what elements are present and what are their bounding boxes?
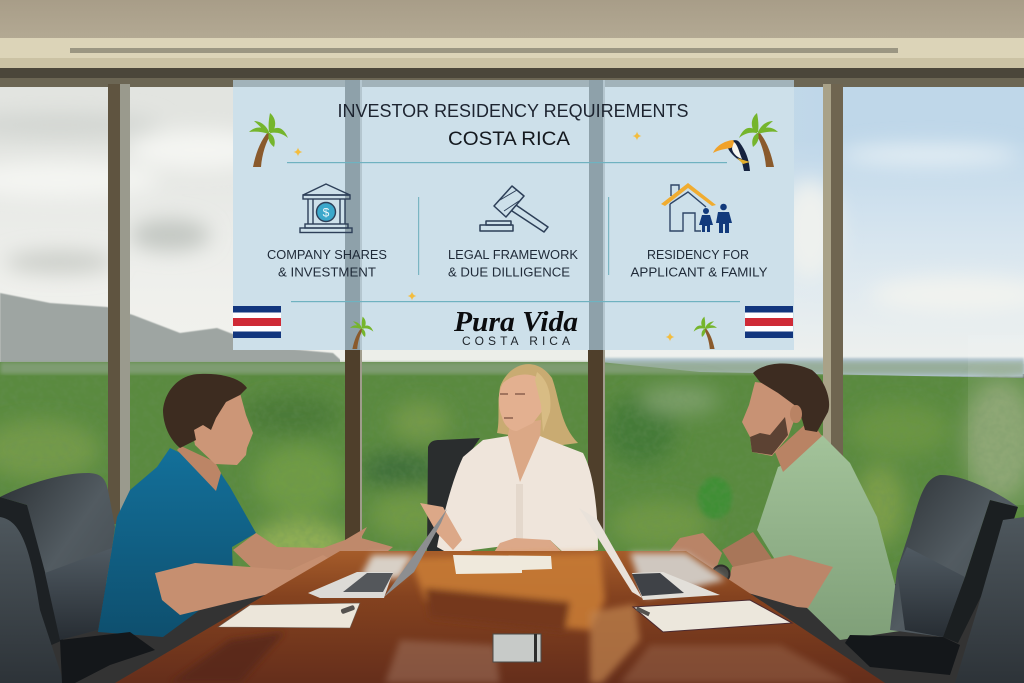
column: company shares (267, 184, 387, 280)
frame seen through the panel (233, 80, 794, 350)
icon: toucan and palm (713, 113, 778, 171)
person: man at left (98, 374, 393, 637)
chairs left (0, 473, 155, 683)
icon: bank with dollar coin: $ (323, 206, 330, 220)
panel: translucent infographic sign (233, 80, 794, 350)
hand (662, 533, 722, 577)
forest texture (307, 376, 1023, 548)
person: man at right (662, 364, 907, 640)
arm (727, 555, 833, 608)
armrest (60, 632, 155, 683)
flag: right (745, 306, 793, 338)
hair front (535, 372, 550, 432)
subtitle: COSTA RICA (448, 129, 570, 150)
label: & INVESTMENT (278, 264, 376, 280)
panel background (233, 80, 794, 350)
column: legal framework (448, 186, 578, 280)
icon: house with family (661, 183, 732, 233)
top divider (287, 162, 727, 163)
small palm right (694, 317, 717, 349)
distant mountains (0, 293, 345, 364)
sea (600, 358, 1024, 378)
hair (163, 374, 247, 448)
face (190, 393, 253, 465)
flag: left (233, 306, 281, 338)
label: LEGAL FRAMEWORK (448, 247, 578, 262)
conference table (115, 508, 885, 683)
rear chair back (0, 473, 115, 640)
front chair (0, 517, 64, 683)
neck (507, 420, 541, 484)
lower arm and hand (155, 555, 353, 615)
small palm left (350, 317, 373, 349)
rear chair rim (943, 500, 1018, 643)
bottom divider (291, 301, 740, 302)
placket (516, 484, 523, 544)
label: COMPANY SHARES (267, 247, 387, 262)
blouse (437, 436, 598, 556)
rear chair lower cushion (897, 547, 965, 637)
rear chair lower cushion (45, 548, 112, 640)
watch (712, 566, 730, 582)
face (742, 382, 798, 456)
left laptop (308, 509, 447, 598)
title: INVESTOR RESIDENCY REQUIREMENTS (338, 101, 688, 121)
armrest (845, 635, 960, 675)
hair (753, 364, 829, 432)
table cable port (493, 634, 541, 662)
neck (177, 446, 221, 491)
window view (0, 84, 1024, 600)
empty back chair (427, 438, 480, 552)
icon: left palm tree (249, 113, 288, 167)
chairs right (845, 475, 1024, 683)
rear chair rim (0, 497, 63, 650)
clipboard right (633, 600, 792, 632)
rear chair back (890, 475, 1018, 637)
glass reflection (968, 374, 1024, 505)
icon: gavel (480, 186, 548, 232)
front chair (955, 517, 1024, 683)
centre papers (453, 555, 552, 574)
ceiling (0, 0, 1024, 68)
forearm far (722, 532, 775, 567)
sunlight and shadow reflections (170, 553, 850, 683)
label: RESIDENCY FOR (647, 247, 749, 262)
label: APPLICANT & FAMILY (630, 264, 768, 280)
person: woman in centre (420, 364, 598, 563)
sparkle accents (294, 132, 674, 342)
face (499, 375, 543, 431)
clipboard left (218, 603, 360, 628)
logo: pura vida: COSTA RICA (462, 334, 570, 348)
window frame (0, 68, 1024, 554)
logo: pura vida: Pura Vida (453, 306, 578, 338)
hair back (497, 364, 578, 447)
label: & DUE DILLIGENCE (448, 264, 570, 280)
ear (790, 405, 802, 423)
beard (750, 417, 788, 455)
forest (0, 362, 1024, 600)
facial features (500, 394, 525, 418)
hands and forearm (420, 503, 563, 563)
shirt (98, 448, 256, 637)
neck (775, 420, 822, 472)
vertical dividers (418, 197, 609, 275)
shirt (757, 435, 907, 640)
column: residency (630, 183, 768, 280)
upper arm and hand (233, 527, 393, 573)
right laptop (579, 508, 720, 600)
